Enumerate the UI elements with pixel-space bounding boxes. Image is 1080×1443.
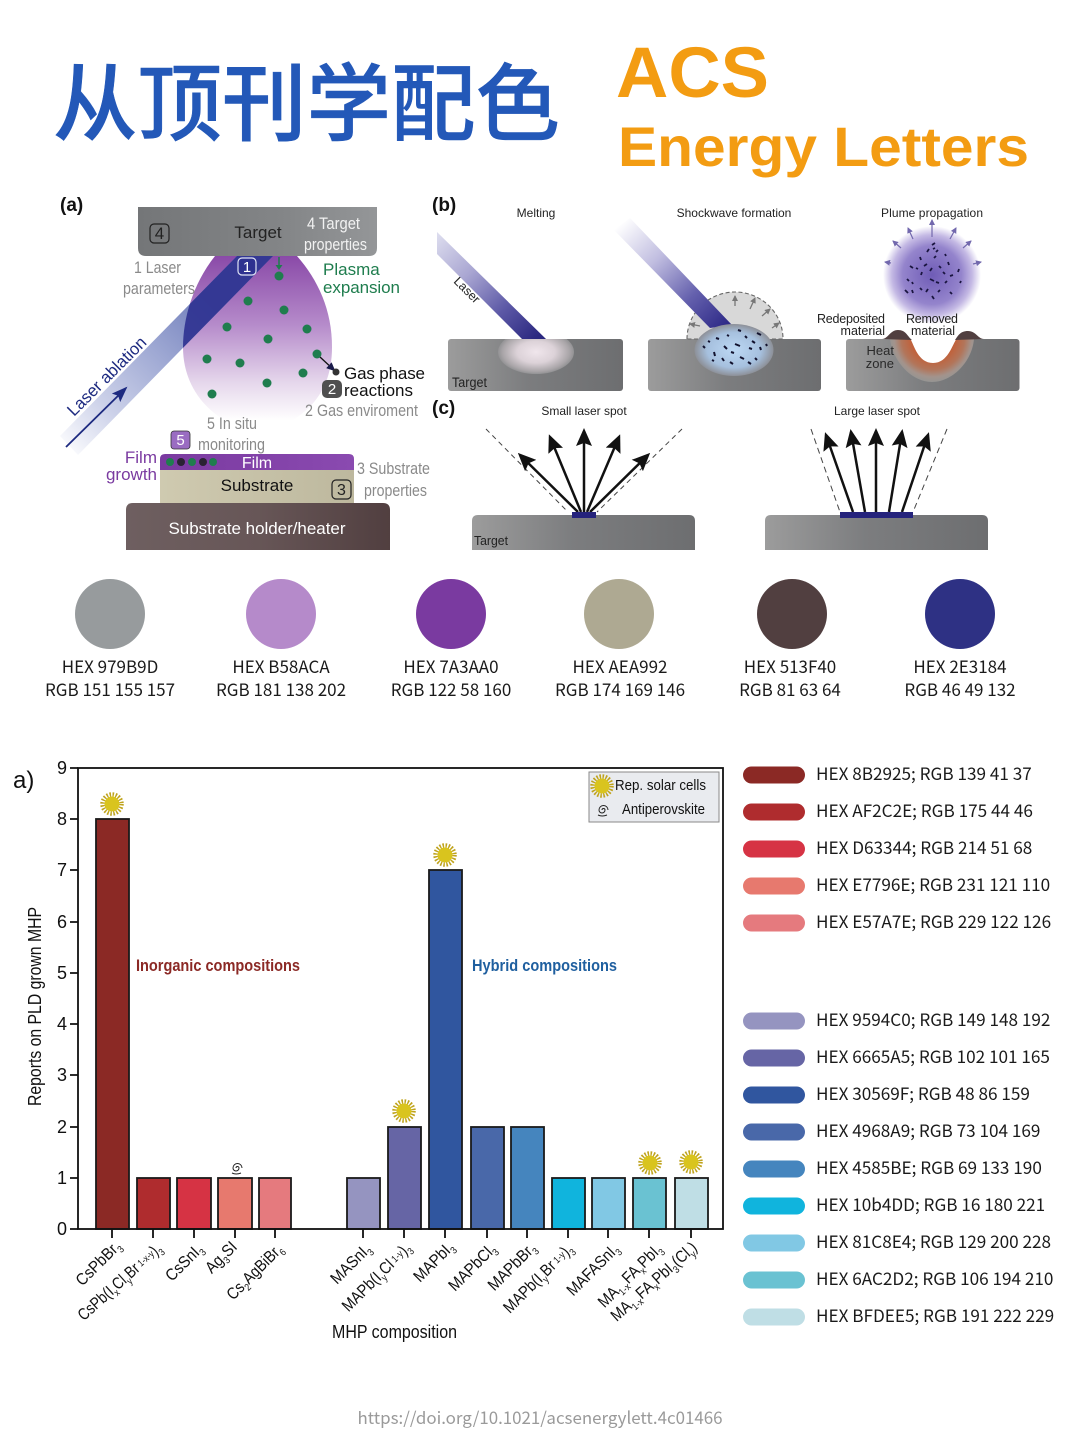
target block (138, 207, 377, 256)
in situ monitoring note: monitoring (198, 435, 265, 454)
swatch 2E3184 (904, 579, 1016, 701)
title: 从顶刊学配色: 从顶刊学配色 (53, 37, 560, 159)
swatch 2E3184: RGB 46 49 132 (904, 676, 1016, 701)
large laser spot (765, 404, 988, 550)
substrate properties note: 3 Substrate (357, 459, 430, 478)
swatch 513F40: RGB 81 63 64 (739, 676, 841, 701)
plasma expansion label: expansion (323, 278, 400, 297)
legend item E7796E: HEX E7796E; RGB 231 121 110 (816, 871, 1050, 896)
swatch 979B9D (45, 579, 175, 701)
small laser spot: Target (474, 533, 508, 548)
x axis composition labels: 2 (242, 1282, 253, 1293)
target block: 4 Target (307, 214, 360, 233)
swatch 7A3AA0: HEX 7A3AA0 (403, 653, 499, 678)
x axis composition labels: y (688, 1249, 699, 1260)
chart panel label: a) (13, 767, 34, 794)
film layer: Film (242, 455, 272, 472)
x axis composition labels: MAPbBr (485, 1243, 536, 1295)
laser ablation label and arrow: Laser ablation (63, 333, 150, 420)
x axis composition labels: PbI (649, 1260, 677, 1288)
x axis composition labels: Br (121, 1259, 144, 1282)
chart legend: Rep. solar cells (615, 778, 706, 794)
gas phase reactions (320, 357, 425, 400)
y axis tick labels: 6 (57, 912, 67, 932)
x axis composition labels: 3 (115, 1244, 127, 1256)
journal name: ACS Energy Letters (616, 34, 1029, 178)
x axis composition labels: AgBiBr (239, 1244, 284, 1288)
x axis composition labels: y (124, 1275, 135, 1287)
label a: (a) (60, 195, 83, 216)
x axis composition labels: 1-x-y (134, 1248, 157, 1270)
x axis composition labels: Cs (223, 1279, 249, 1304)
x axis composition labels: 3 (365, 1247, 377, 1259)
film growth label (106, 448, 157, 484)
x axis composition labels: 3 (221, 1255, 233, 1267)
x axis composition labels: 3 (156, 1247, 167, 1258)
x axis composition labels: ) (685, 1239, 701, 1255)
plot frame and axes (70, 768, 723, 1238)
x axis composition labels: CsPbBr (73, 1241, 121, 1290)
melting stage (437, 206, 623, 391)
swatch 979B9D: HEX 979B9D (62, 653, 158, 678)
in situ monitoring note: 5 In situ (207, 414, 257, 433)
melting stage: Target (452, 375, 487, 390)
plasma expansion label (323, 260, 400, 297)
bar chart: reports on PLD grown MHP (13, 758, 723, 1342)
x axis composition labels: SI (218, 1238, 241, 1261)
x axis composition labels: PbI (634, 1244, 663, 1272)
badge 1: 1 (243, 259, 251, 276)
x axis composition labels: MA (595, 1283, 623, 1312)
legend item 10b4DD: HEX 10b4DD; RGB 16 180 221 (816, 1191, 1045, 1216)
swatch 7A3AA0 (391, 579, 511, 701)
panel c: laser spot size comparison (432, 398, 988, 550)
x axis composition labels: ) (395, 1243, 412, 1259)
gas phase reactions: reactions (344, 381, 413, 400)
laser parameters note: parameters (123, 279, 195, 298)
y axis tick labels: 4 (57, 1014, 67, 1034)
swatch AEA992 (555, 579, 685, 701)
x axis composition labels (73, 1237, 702, 1327)
laser beam (60, 256, 273, 455)
plume propagation stage: zone (866, 356, 894, 371)
y axis tick labels: 9 (57, 758, 67, 778)
x axis composition labels: y (379, 1272, 390, 1283)
legend item E57A7E: HEX E57A7E; RGB 229 122 126 (816, 908, 1051, 933)
x axis composition labels: 3 (656, 1246, 667, 1258)
film growth label: growth (106, 465, 157, 484)
label b: (b) (432, 195, 456, 216)
x axis composition labels: MAPbCl (445, 1244, 496, 1295)
panel b: laser-target interaction (432, 195, 1020, 391)
substrate (160, 470, 354, 503)
plume propagation stage: material (911, 324, 955, 338)
y axis tick labels: 7 (57, 860, 67, 880)
plume propagation stage: Removed (906, 312, 958, 326)
x axis composition labels: MAFASnI (563, 1244, 620, 1300)
legend item 81C8E4: HEX 81C8E4; RGB 129 200 228 (816, 1228, 1051, 1253)
swatch 513F40 (739, 579, 841, 701)
swatch 2E3184: HEX 2E3184 (913, 653, 1007, 678)
y axis tick labels: 8 (57, 809, 67, 829)
in situ monitoring note (198, 414, 265, 454)
colour legend: blue series (743, 1006, 1054, 1327)
plume propagation stage (817, 206, 1020, 391)
colour swatches row (45, 579, 1016, 701)
y axis tick labels (57, 758, 67, 1239)
x axis composition labels: 6 (277, 1247, 288, 1258)
x axis composition labels: 1-x (616, 1280, 633, 1297)
badge 5 (171, 431, 190, 449)
chart legend: Antiperovskite (622, 802, 705, 818)
x axis composition labels: Ag (202, 1252, 228, 1277)
plume propagation stage: Plume propagation (881, 206, 983, 220)
x axis composition labels: Br (537, 1257, 560, 1280)
substrate properties note (357, 459, 430, 500)
shockwave stage: Shockwave formation (677, 206, 791, 220)
plume propagation stage: material (841, 324, 885, 338)
swatch 979B9D: RGB 151 155 157 (45, 676, 175, 701)
target block: Target (234, 223, 282, 242)
swatch AEA992: HEX AEA992 (573, 653, 667, 678)
x axis composition labels: ) (147, 1243, 162, 1259)
journal name: ACS Energy Letters: ACS (616, 34, 769, 113)
gas phase reactions: 2 (328, 381, 336, 398)
target block: properties (304, 235, 367, 254)
badge 1 (238, 258, 256, 276)
category label: inorganic: Inorganic compositions (136, 956, 300, 975)
x axis composition labels: 3 (567, 1247, 578, 1258)
x axis composition labels: FA (632, 1277, 658, 1303)
small laser spot (472, 404, 695, 550)
x axis composition labels: Cl (108, 1271, 130, 1294)
gas phase reactions: Gas phase (344, 364, 425, 383)
plasma plume (183, 256, 332, 426)
substrate: 3 (337, 482, 346, 499)
category label: hybrid: Hybrid compositions (472, 956, 617, 975)
substrate properties note: properties (364, 481, 427, 500)
icon: antiperovskite spiral (232, 1164, 242, 1174)
x axis composition labels: 1-y (549, 1249, 567, 1267)
x axis composition labels: FA (619, 1262, 644, 1288)
x axis composition labels: MASnI (327, 1244, 371, 1288)
y axis tick labels: 3 (57, 1065, 67, 1085)
substrate: Substrate (221, 476, 293, 495)
shockwave stage (614, 206, 821, 391)
film growth label: Film (125, 448, 157, 467)
legend item 30569F: HEX 30569F; RGB 48 86 159 (816, 1080, 1030, 1105)
swatch 513F40: HEX 513F40 (744, 653, 836, 678)
x axis composition labels: x (652, 1281, 662, 1293)
legend item 6AC2D2: HEX 6AC2D2; RGB 106 194 210 (816, 1265, 1053, 1290)
x axis composition labels: MAPb(I (500, 1270, 547, 1317)
small laser spot: Small laser spot (541, 404, 627, 418)
melting stage: Melting (517, 206, 555, 220)
swatch B58ACA: RGB 181 138 202 (216, 676, 346, 701)
gas environment note: 2 Gas enviroment (305, 401, 418, 420)
badge 5: 5 (176, 432, 185, 449)
x axis composition labels: 3 (197, 1247, 209, 1259)
x axis title: MHP composition (332, 1322, 457, 1342)
legend item 8B2925: HEX 8B2925; RGB 139 41 37 (816, 760, 1032, 785)
x axis composition labels: ) (557, 1244, 574, 1260)
x axis composition labels: CsPb(I (74, 1283, 118, 1325)
legend item 6665A5: HEX 6665A5; RGB 102 101 165 (816, 1043, 1050, 1068)
x axis composition labels: x (637, 1265, 649, 1276)
swatch B58ACA (216, 579, 346, 701)
legend item 4968A9: HEX 4968A9; RGB 73 104 169 (816, 1117, 1040, 1142)
x axis composition labels: (Cl (668, 1245, 694, 1271)
x axis composition labels: MA (607, 1297, 636, 1325)
legend item D63344: HEX D63344; RGB 214 51 68 (816, 834, 1032, 859)
source DOI: https://doi.org/10.1021/acsenergylett.4c01466 (358, 1404, 722, 1429)
y axis tick labels: 5 (57, 963, 67, 983)
y axis tick labels: 2 (57, 1117, 67, 1137)
x axis composition labels: CsSnI (162, 1244, 203, 1285)
x axis composition labels: 3 (405, 1246, 416, 1257)
legend item 9594C0: HEX 9594C0; RGB 149 148 192 (816, 1006, 1050, 1031)
swatch B58ACA: HEX B58ACA (232, 653, 330, 678)
x axis composition labels: 3 (490, 1247, 502, 1259)
x axis composition labels: 1-y (387, 1248, 405, 1266)
y axis title: Reports on PLD grown MHP (25, 907, 45, 1106)
x axis composition labels: MAPbI (410, 1242, 454, 1286)
journal name: ACS Energy Letters: Energy Letters (618, 115, 1029, 178)
laser parameters note: 1 Laser (134, 258, 181, 277)
colour legend: red series (743, 760, 1051, 933)
x axis composition labels: MAPb(I (339, 1269, 385, 1316)
x axis composition labels: 3 (448, 1245, 460, 1257)
legend item BFDEE5: HEX BFDEE5; RGB 191 222 229 (816, 1302, 1054, 1327)
laser parameters note (123, 258, 195, 298)
x axis composition labels: Cl (376, 1256, 398, 1279)
x axis composition labels: 3 (671, 1264, 682, 1275)
plume propagation stage: Heat (867, 343, 894, 358)
film layer (160, 454, 354, 472)
legend item AF2C2E: HEX AF2C2E; RGB 175 44 46 (816, 797, 1033, 822)
x axis composition labels: y (541, 1274, 551, 1285)
x axis composition labels: 3 (530, 1246, 542, 1258)
plume propagation stage: Redeposited (817, 312, 885, 326)
label c: (c) (432, 398, 455, 419)
melting stage: Laser (451, 274, 483, 306)
substrate holder: Substrate holder/heater (168, 519, 346, 538)
substrate holder (126, 503, 390, 550)
x axis composition labels: x (112, 1287, 122, 1298)
bars (96, 819, 708, 1229)
x axis composition labels: 3 (613, 1246, 624, 1258)
y axis tick labels: 0 (57, 1219, 67, 1239)
swatch 7A3AA0: RGB 122 58 160 (391, 676, 511, 701)
plasma species dots (202, 257, 322, 398)
target block: 4 (155, 224, 164, 243)
y axis tick labels: 1 (57, 1168, 67, 1188)
chart legend (589, 772, 719, 822)
x axis composition labels: 1-x (630, 1296, 646, 1312)
large laser spot: Large laser spot (834, 404, 921, 418)
icons: solar cell suns above bars (102, 794, 700, 1172)
plasma expansion label: Plasma (323, 260, 380, 279)
swatch AEA992: RGB 174 169 146 (555, 676, 685, 701)
legend item 4585BE: HEX 4585BE; RGB 69 133 190 (816, 1154, 1042, 1179)
panel a: pulsed laser deposition schematic (60, 195, 430, 550)
